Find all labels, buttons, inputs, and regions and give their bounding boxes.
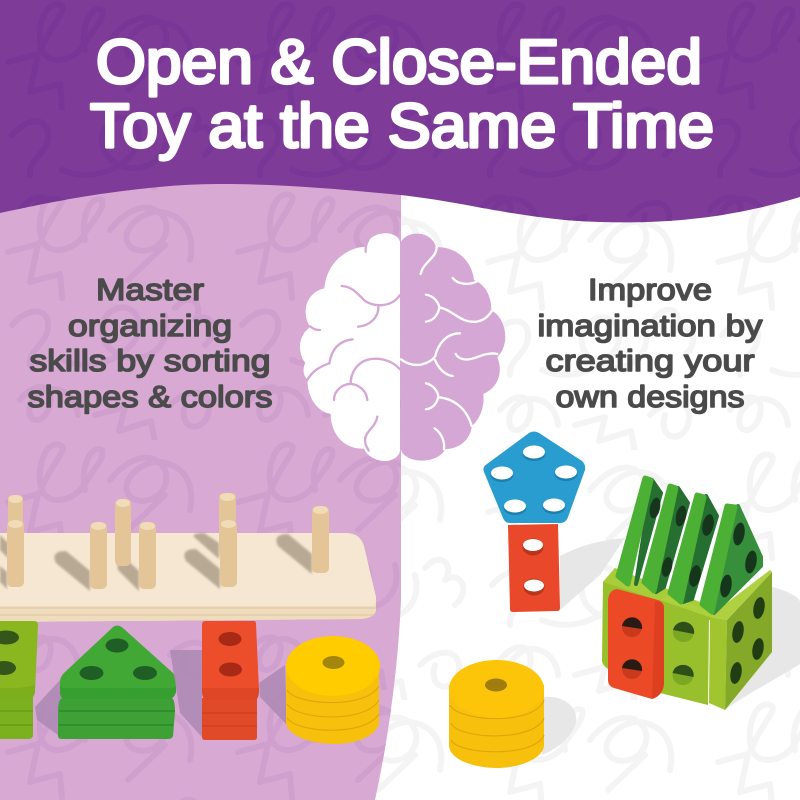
toy: green triangles roof bbox=[618, 478, 761, 613]
panel: purple title band bbox=[0, 0, 800, 222]
text block: master organizing skills bbox=[28, 272, 272, 414]
text block: improve imagination: Improve bbox=[588, 272, 712, 307]
toy: green triangle stack bbox=[35, 626, 176, 739]
toy shadow: blocks on white bbox=[542, 538, 800, 755]
text block: master organizing skills: Master bbox=[96, 272, 204, 307]
title: Open & Close-Ended bbox=[96, 28, 702, 97]
toy: wooden peg board bbox=[0, 533, 376, 622]
toy: wooden pegs bbox=[7, 493, 329, 589]
toy: red block under pentagon bbox=[508, 524, 560, 612]
toy: red front block bbox=[608, 589, 664, 699]
title bbox=[90, 28, 714, 161]
toy: green square stack bbox=[0, 621, 38, 739]
text block: improve imagination bbox=[538, 272, 763, 414]
title: Toy at the Same Time bbox=[90, 92, 714, 161]
text block: master organizing skills: skills by sorting bbox=[30, 343, 270, 378]
toy: yellow ring stack right bbox=[449, 660, 544, 768]
text block: improve imagination: own designs bbox=[556, 379, 744, 414]
text block: master organizing skills: shapes & colors bbox=[28, 379, 272, 414]
toy: blue pentagon bbox=[483, 432, 585, 523]
text block: improve imagination: creating your bbox=[546, 343, 754, 378]
text block: master organizing skills: organizing bbox=[68, 308, 232, 343]
toy: red rectangle stack bbox=[170, 621, 259, 740]
text block: improve imagination: imagination by bbox=[538, 308, 763, 343]
panel: white right background bbox=[0, 180, 800, 800]
toy: green cube bbox=[602, 568, 772, 710]
panel: lilac left background bbox=[0, 180, 401, 800]
icon: brain bbox=[300, 233, 505, 461]
toy: yellow ring stack bbox=[259, 636, 380, 744]
